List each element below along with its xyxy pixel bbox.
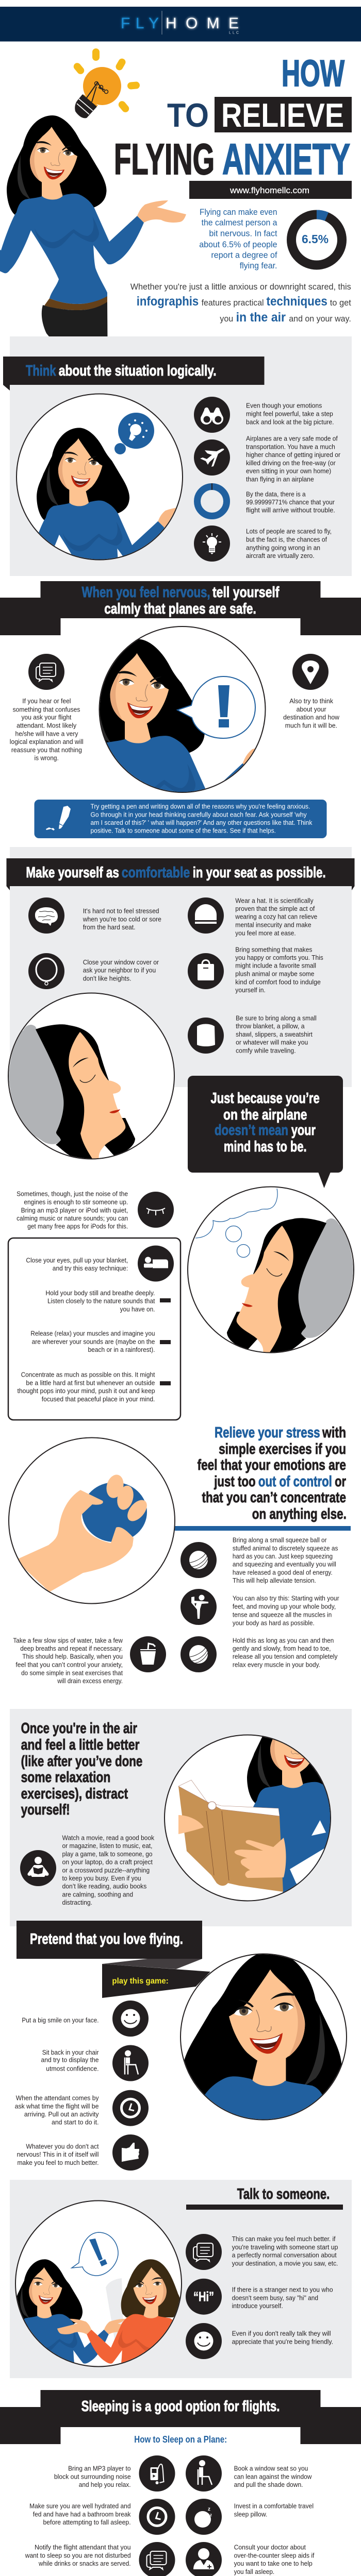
heading: comfortable [6,858,355,890]
text: sips of water: deep breaths and repeat if necessary. [20,1645,123,1652]
icon: chat [28,654,64,690]
box: relaxation technique: and try this easy technique: [53,1264,128,1272]
donut chart: 6.5%: 6.5% [302,232,329,246]
text: friendly: Even if you don't really talk they will [232,2330,331,2337]
box: relaxation technique: focused that peaceful place in your mind. [42,1395,155,1403]
text: pillow [234,2502,314,2518]
text: ask your attendant: logical explanation and will [10,738,84,745]
text: noise of the engines: Bring an mp3 player or iPod with quiet, [21,1206,128,1214]
text: conversation: your destination, a movie you saw, etc. [232,2259,338,2267]
text: blanket [236,1014,317,1054]
portrait with thought bubble [16,394,183,561]
text: mp3 [54,2465,131,2488]
icon: bed [138,1246,174,1282]
text: destination [283,697,340,729]
box: relaxation technique [8,1238,180,1420]
speech bubble: your mind: Just because you’re [210,1090,320,1107]
text: window seat [234,2465,312,2488]
text: confidence: and try to display the [41,2056,99,2063]
text: blanket: shawl, slippers, a sweatshirt [236,1030,313,1038]
text: tense muscles [233,1595,339,1626]
text: big picture [246,402,334,426]
icon: blanket [188,1018,224,1054]
text: conversation: you're traveling with someone start up [232,2243,338,2251]
text: lots of people: Lots of people are scared to fly, [246,528,332,535]
donut chart: 6.5% [291,214,342,265]
text: squeeze ball: hard as you can. Just keep squeezing [233,1552,333,1560]
text: doctor: Consult your doctor about [234,2544,306,2551]
intro text [199,208,277,270]
heading: comfortable: comfortable [122,865,190,881]
heading: relieve your stress: just too [214,1473,256,1490]
text: conversation [232,2235,338,2267]
text: statistic: flight will arrive without trouble. [246,506,335,514]
text: airplanes are safe: than flying in an airplane [246,475,314,483]
heading: when you feel nervous [0,581,361,635]
callout: exclamation bubble [177,676,255,738]
text: squeeze ball [233,1536,338,1584]
text: notify attendant: Notify the flight attendant that you [35,2544,131,2551]
text: airplanes are safe [246,435,341,483]
heading: talk to someone [186,2186,343,2210]
text: don't act nervous: nervous! This in it of itself will [17,2150,99,2158]
icon: location pin [292,654,329,690]
text: stay busy: or a crossword puzzle--anything [62,1866,150,1874]
intro text: flying fear. [240,261,277,270]
divider bar [175,1526,351,1531]
heading: distract yourself: some relaxation [21,1769,110,1786]
intro paragraph: to get [330,298,351,308]
text: pillow: sleep pillow. [234,2510,267,2518]
icon: binoculars [194,397,230,433]
text: too cold: when you're too cold or sore [83,915,161,923]
heading: relieve your stress: Relieve your stress [215,1425,320,1441]
heading: think: about the situation logically. [59,363,217,379]
text: comforts: Bring something that makes [235,945,313,953]
title: FLYING [114,135,215,183]
text: blanket: or whatever will make you [236,1039,308,1046]
ribbon heading: pretend: Pretend that you love flying. [30,1931,183,1947]
text: comforts [235,945,323,994]
text: notify attendant: want to sleep so you are not disturbed [25,2551,131,2559]
box: relaxation technique: beach or in a rainforest). [88,1346,155,1353]
text: comforts: yourself in. [235,986,266,994]
text: ask your attendant [10,697,84,762]
text: conversation: This can make you feel much better. if [232,2235,336,2243]
text: don't act nervous [17,2142,99,2166]
text: attendant: and start to do it. [52,2119,99,2126]
text: window cover: ask your neighbor to if you [83,967,156,974]
text: squeeze ball: stuffed animal to discretely squeeze as [233,1544,338,1552]
illustration: two women talking [15,2200,182,2367]
illustration: hand squeezing ball [9,1437,175,1603]
panel: comfortable in your seat [6,847,355,1087]
text: blanket: throw blanket, a pillow, a [236,1022,305,1030]
heading: sleeping [0,2390,361,2444]
callout: write down reasons: Try getting a pen and writing down all of the reasons why you're feeling anxious. [91,803,310,810]
text: friendly: appreciate that you're being friendly. [232,2337,333,2345]
text: wear a hat: Wear a hat. It is scientifically [235,896,314,904]
text: ask your attendant: you ask your flight [22,714,72,721]
icon: sleep pillow: z [208,2506,210,2512]
title [114,53,352,183]
text: ask your attendant: is wrong. [34,754,59,762]
illustration: woman reading [164,1734,331,1901]
logo: FlyHome: FLY [121,15,159,32]
text: lots of people: anything going wrong in an [246,544,320,551]
portrait: smiling woman [180,1954,347,2121]
icon: sleep pillow [186,2499,222,2535]
icon: chair [112,2045,149,2081]
text: hydrated: Make sure you are well hydrated and [29,2502,130,2510]
thought cloud [195,1189,277,1257]
speech bubble [72,2232,118,2276]
panel: think logically [3,336,352,576]
text: stay busy: don’t like reading, audio books [62,1883,147,1890]
woman presenter figure [0,115,186,378]
text: airplanes are safe: even sitting in your own home) [246,467,331,475]
logo: FlyHome: HOME [166,15,239,32]
text: destination: much fun it will be. [285,721,337,729]
intro paragraph: infographis [137,294,199,309]
text: tense muscles: tense and squeeze all the muscles in [233,1611,332,1618]
text: hydrated: before attempting to fall asleep. [43,2518,131,2526]
heading: sleeping: Sleeping is a good option for flights. [81,2398,280,2415]
text: wear a hat [235,896,317,937]
intro paragraph: you [220,314,233,324]
text: say hi: introduce yourself. [232,2302,283,2310]
heading: think: Think [26,363,56,379]
text: big picture: Even though your emotions [246,402,322,410]
text: wear a hat: mental insecurity and make [235,921,311,928]
box: relaxation technique: Concentrate as much as possible on this. It might [21,1371,155,1379]
speech bubble: your mind [188,1076,343,1188]
heading: when you feel nervous: calmly that planes are safe. [104,601,256,617]
text: destination: about your [297,705,326,713]
text: release tension: Hold this as long as you can and then [233,1636,334,1644]
speech bubble: your mind: on the airplane [223,1107,307,1123]
text: smile: Put a big smile on your face. [22,2016,99,2024]
text: doctor: you want to take one to help [234,2560,313,2567]
icon: "Hi" [186,2279,222,2315]
text: release tension: gently and slowly, from head to toe, [233,1645,331,1652]
text: conversation: a perfectly normal conversation about [232,2251,337,2259]
text: hydrated: fed and have had a bathroom break [33,2510,131,2518]
text: comforts: plush animal or maybe some [235,970,314,978]
text: release tension [233,1636,338,1668]
intro text: report a degree of [211,250,277,260]
text: release tension: relax every muscle in your body. [233,1660,320,1668]
icon: thumbs up [112,2134,149,2171]
icon: ball [180,1636,217,1672]
text: release tension: release all you tension and completely [233,1653,338,1660]
text: window seat: Book a window seat so you [234,2465,308,2472]
box: relaxation technique: be a little hard at first but whenever an outside [26,1379,155,1386]
portrait: sleeping on pillow [8,993,174,1162]
portrait with speech bubble [99,626,266,793]
icon: stretching figure [180,1589,217,1625]
text: say hi: If there is a stranger next to you who [232,2286,333,2294]
text: notify attendant [25,2544,131,2567]
text: lots of people [246,528,332,560]
text: squeeze ball: have released a good deal of energy. [233,1568,333,1576]
text: destination: destination and how [283,714,340,721]
text: sips of water: feel that you can’t control your anxiety, [15,1660,123,1668]
text: blanket: Be sure to bring along a small [236,1014,317,1022]
text: too cold: It's hard not to feel stressed [83,907,159,914]
text: confidence: utmost confidence. [46,2064,99,2072]
text: airplanes are safe: higher chance of getting injured or [246,451,341,459]
text: noise of the engines: calming music or nature sounds; you can [17,1214,128,1222]
callout: write down reasons: am I scared of this?' ' what will happen?' And any other questions like that. Think [91,819,313,826]
box: relaxation technique: Close your eyes, pull up your blanket, [26,1256,128,1264]
text: noise of the engines: Sometimes, though, just the noise of the [17,1190,128,1198]
text: say hi: doesn't seem busy, say "hi" and [232,2294,318,2301]
icon: chat [139,2542,175,2576]
panel: talk to someone [10,2180,352,2378]
text: don't act nervous: make you feel to much better. [18,2159,99,2166]
heading: when you feel nervous: When you feel nervous, [81,584,210,601]
heading: distract yourself: yourself! [21,1802,70,1818]
intro text: the calmest person a [202,218,277,228]
box: relaxation technique: Release (relax) your muscles and imagine you [30,1330,155,1337]
text: sips of water: This should help. Basically, when you [22,1653,123,1660]
ribbon heading: pretend: play this game: [112,1977,169,1986]
text: wear a hat: you feel more at ease. [235,929,296,937]
text: attendant: ask what time the flight will be [15,2102,99,2110]
text: comforts: might include a favorite small [235,962,316,970]
text: tense muscles: your body as hard as possible. [233,1619,315,1626]
box: relaxation technique: Hold your body still and breathe deeply. [45,1289,155,1297]
heading: think [3,357,264,391]
icon: bulb [194,526,230,562]
text: airplanes are safe: Airplanes are a very safe mode of [246,435,338,443]
panel: distract yourself [10,1709,352,1926]
text: lots of people: aircraft are virtually zero. [246,552,315,560]
text: doctor: you fall asleep. [234,2568,274,2575]
icon: ball [180,1542,217,1578]
text: squeeze ball: This will help alleviate tension. [233,1577,316,1584]
icon: hat [188,897,224,934]
icon: plane [194,439,230,476]
heading: relieve your stress [198,1425,347,1522]
text: blanket: comfy while traveling. [236,1046,296,1054]
text: comforts: you happy or comforts you. This [235,954,323,961]
text: squeeze ball: Bring along a small squeeze ball or [233,1536,327,1544]
text: noise of the engines: engines is enough to stir someone up. [24,1198,128,1206]
speech bubble: your mind: your [291,1122,316,1139]
icon: closed eye [138,1192,174,1228]
icon: clock [139,2499,175,2535]
callout: write down reasons: Go through it in your head thinking carefully about each fear. Ask yourself 'why [91,810,307,818]
text: statistic [246,490,335,514]
text: stay busy: or magazine, listen to music, eat, [62,1842,153,1850]
text: stay busy: are calming, soothing and [62,1890,133,1898]
heading: distract yourself: (like after you’ve done [21,1753,142,1770]
text: tense muscles: feet, and moving up your whole body, [233,1603,336,1611]
text: mp3: Bring an MP3 player to [68,2465,131,2472]
text: wear a hat: wearing a cozy hat can relieve [235,913,317,921]
intro text: Flying can make even [200,208,277,217]
text: window seat: can lean against the window [234,2472,312,2480]
text: statistic: By the data, there is a [246,490,306,498]
text: doctor: over-the-counter sleep aids if [234,2551,315,2559]
icon: light bulb [72,48,140,118]
text: attendant: When the attendant comes by [16,2094,99,2102]
text: attendant: arriving. Pull out an activity [24,2110,99,2118]
intro text: about 6.5% of people [199,240,277,249]
intro paragraph: and on your way. [289,314,351,324]
header bar [0,7,361,41]
intro paragraph: in the air [236,310,286,325]
heading: relieve your stress: with [322,1425,346,1441]
icon: clock [112,2090,149,2126]
text: noise of the engines [17,1190,128,1230]
heading: comfortable: Make yourself as [26,865,119,881]
text: too cold: from the hard seat. [83,923,135,931]
text: ask your attendant: If you hear or feel [22,697,71,705]
icon: bag [188,953,224,989]
speech bubble: your mind: doesn’t mean [215,1122,288,1139]
heading: relieve your stress: out of control [258,1473,332,1490]
icon: window [28,953,64,989]
icon: reader [20,1850,56,1886]
heading: distract yourself: Once you're in the air [21,1720,137,1737]
website label [189,181,352,199]
text: attendant [15,2094,99,2126]
text: noise of the engines: get many free apps for iPods for this. [27,1223,128,1230]
text: stay busy: distracting. [62,1899,92,1906]
intro text: bit nervous. In fact [209,229,277,238]
text: pillow: Invest in a comfortable travel [234,2502,314,2510]
text: big picture: back and look at the big picture. [246,418,334,426]
heading: relieve your stress: or [335,1473,346,1490]
text: ask your attendant: something that confuses [13,705,80,713]
text: hydrated [29,2502,131,2526]
text: confidence: Sit back in your chair [42,2048,99,2056]
text: confidence [41,2048,99,2072]
icon: chat [186,2234,222,2270]
callout: write down reasons [34,800,327,838]
icon: seated person [186,2455,222,2492]
text: window cover: Close your window cover or [83,958,159,966]
icon: smile [186,2323,222,2359]
ribbon heading: pretend [17,1921,210,1998]
text: doctor [234,2544,315,2575]
subheading: how to sleep: How to Sleep on a Plane: [134,2434,227,2445]
text: sips of water: Take a few slow sips of water, take a few [13,1636,123,1644]
text: stay busy [62,1834,155,1906]
text: lots of people: but the fact is, the chances of [246,536,327,544]
icon: brain [28,897,64,934]
heading: when you feel nervous: tell yourself [212,584,280,601]
speech bubble: your mind: mind has to be. [224,1139,307,1155]
text: too cold [83,907,161,931]
title: RELIEVE [221,96,344,134]
text: airplanes are safe: transportation. You have a much [246,443,335,450]
text: comforts: kind of comfort food to indulge [235,978,321,986]
text: sips of water: do some simple in seat exercises that [21,1669,123,1676]
intro paragraph: techniques [266,294,327,309]
text: sips of water [13,1636,123,1685]
portrait: sleeping with thought cloud [188,1187,354,1355]
text: window cover: don't like heights. [83,974,131,982]
callout: write down reasons: positive. Talk to someone about some of the fears. See if that helps. [91,827,276,835]
box: relaxation technique: Listen closely to the nature sounds that [47,1297,155,1305]
text: big picture: might feel powerful, take a step [246,410,333,418]
text: destination: Also try to think [289,697,333,705]
heading: talk to someone: Talk to someone. [237,2186,330,2202]
text: window seat: and pull the shade down. [234,2481,303,2488]
box: relaxation technique: thought pops into your mind, push it out and keep [18,1387,155,1395]
text: wear a hat: proven that the simple act of [235,905,315,912]
text: tense muscles: You can also try this: Starting with your [233,1595,339,1602]
icon: doctor [186,2542,222,2576]
text: friendly [232,2330,333,2345]
logo: FlyHome [121,11,239,35]
text: don't act nervous: Whatever you do don't act [26,2142,99,2150]
text: ask your attendant: attendant. Most likely [17,722,77,730]
icon: progress ring [197,483,227,516]
text: airplanes are safe: killed driving on the free-way (or [246,459,336,467]
text: mp3: block out surrounding noise [54,2472,131,2480]
icon: pen [46,806,71,831]
text: squeeze ball: and squeezing and eventually you will [233,1561,336,1568]
text: notify attendant: while drinks or snacks are served. [38,2560,131,2567]
icon: drink cup [130,1636,166,1672]
icon: sleep pillow: z [210,2513,212,2517]
heading: distract yourself: and feel a little better [21,1737,139,1753]
website label: www.flyhomellc.com [229,185,309,195]
icon: smile [112,2001,149,2037]
text: window cover [83,958,159,982]
intro paragraph: features practical [202,298,264,308]
text: stay busy: play a game, talk to someone, go [62,1850,153,1858]
box: relaxation technique: are wherever your sounds are (maybe on the [32,1337,155,1345]
text: ask your attendant: he/she will have a very [15,730,78,737]
text: stay busy: on your laptop, do a craft project [62,1858,153,1866]
text: stay busy: Watch a movie, read a good book [62,1834,155,1841]
icon: "Hi": “Hi” [193,2289,214,2304]
logo: FlyHome: LLC [229,31,239,35]
intro paragraph: Whether you're just a little anxious or downright scared, this [130,282,351,292]
heading: distract yourself [21,1720,142,1818]
text: say hi [232,2286,333,2310]
heading: distract yourself: exercises), distract [21,1786,128,1802]
text: sips of water: will drain excess energy. [57,1677,123,1685]
text: statistic: 99.99999771% chance that your [246,498,335,506]
icon: mp3 player [139,2455,175,2492]
text: ask your attendant: reassure you that nothing [11,746,82,754]
text: mp3: and help you relax. [79,2481,131,2488]
title: TO [167,96,209,134]
box: relaxation technique: you have on. [120,1305,155,1313]
intro paragraph [130,282,351,325]
text: stay busy: to keep you busy. Even if you [62,1874,141,1882]
